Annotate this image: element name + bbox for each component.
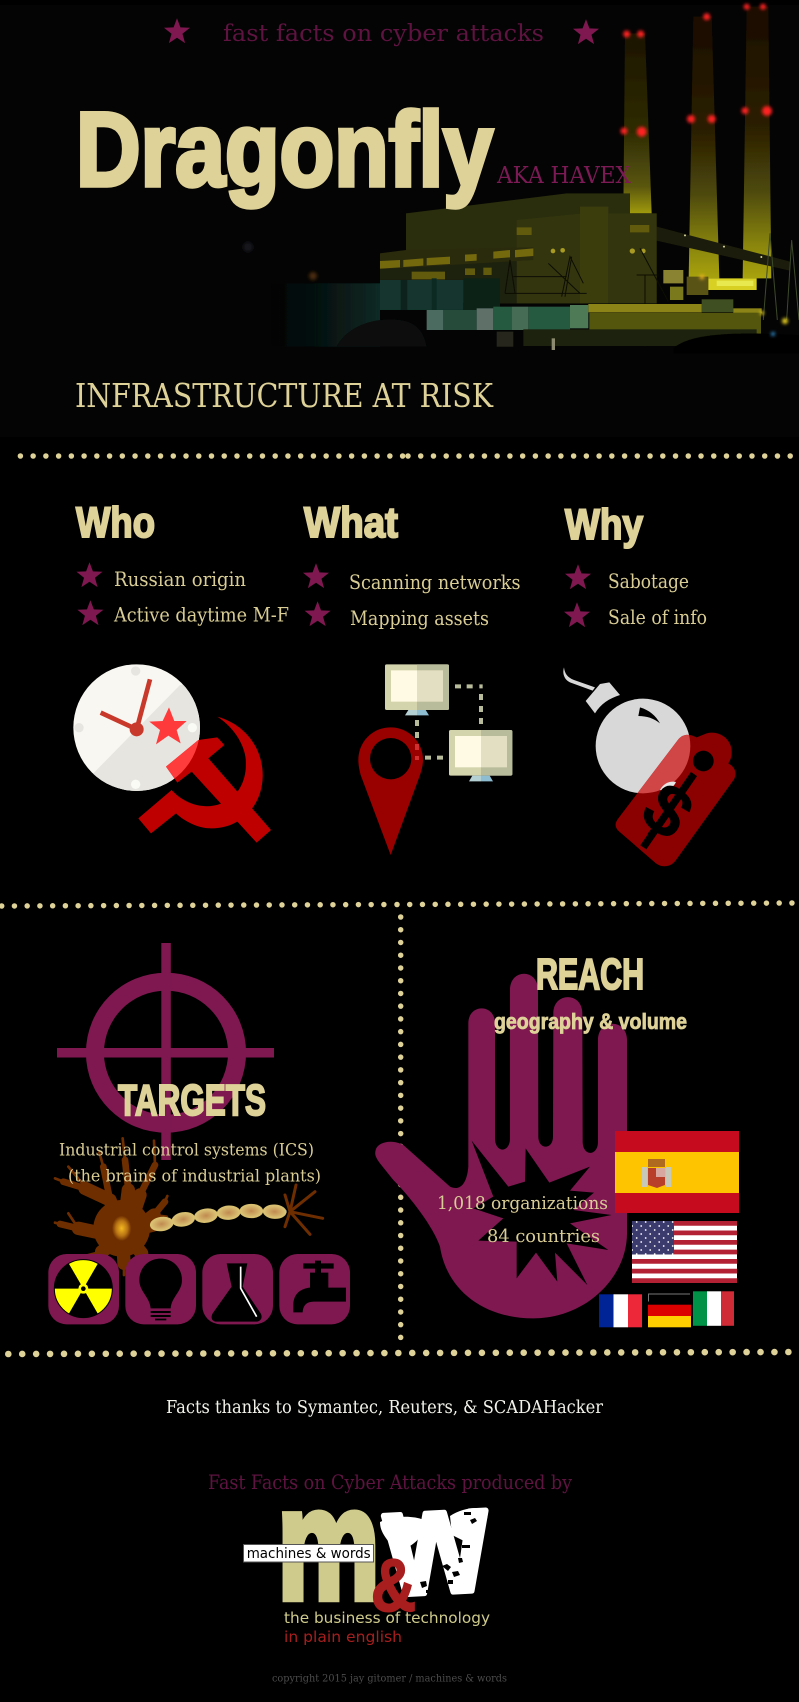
heading: who: Who <box>76 499 155 547</box>
icon row: industries <box>48 1254 350 1324</box>
flag: Spain <box>615 1131 739 1213</box>
icon: bomb and price tag: $ <box>626 766 709 856</box>
logo: machines and words: & <box>371 1544 416 1627</box>
heading: why: Why <box>565 501 643 549</box>
text: targets description: Industrial control systems (ICS) <box>59 1141 314 1161</box>
credits line: Facts thanks to Symantec, Reuters, & SCADAHacker <box>166 1398 604 1418</box>
heading: targets: TARGETS <box>118 1076 266 1125</box>
list: why items <box>564 564 707 629</box>
producer line: Fast Facts on Cyber Attacks produced by <box>208 1470 573 1494</box>
list: why items: Sale of info <box>608 606 707 629</box>
logo: machines and words: m <box>277 1455 380 1633</box>
title: Dragonfly <box>76 92 493 208</box>
icon: clock with hammer and sickle <box>73 664 271 843</box>
logo: machines and words: in plain english <box>284 1628 402 1646</box>
stat: organizations: 1,018 organizations <box>437 1193 608 1214</box>
logo: machines and words: the business of technology <box>284 1609 490 1627</box>
panel: reach <box>375 950 739 1327</box>
icon: star left <box>164 18 190 43</box>
icon: hand with burst <box>375 974 627 1318</box>
list: who items: Active daytime M-F <box>113 604 289 627</box>
panel: why <box>563 501 736 866</box>
heading: infrastructure at risk: INFRASTRUCTURE AT RISK <box>75 376 494 415</box>
hero photo: power plant at night <box>0 4 799 437</box>
heading: reach: REACH <box>536 950 644 999</box>
panel: what <box>303 499 520 855</box>
flag: USA <box>632 1221 737 1283</box>
icon: neuron <box>55 1138 323 1275</box>
flag: France <box>599 1294 642 1327</box>
flag: Italy <box>693 1291 734 1326</box>
list: why items: Sabotage <box>608 570 689 593</box>
logo: machines and words: machines & words <box>247 1546 371 1562</box>
icon: crosshair <box>57 943 274 1160</box>
logo: machines and words <box>244 1454 492 1646</box>
top banner <box>164 18 599 47</box>
copyright: copyright 2015 jay gitomer / machines & words <box>272 1672 507 1684</box>
icon: radiation <box>48 1254 119 1324</box>
panel: who <box>73 499 289 863</box>
list: what items: Scanning networks <box>349 571 520 594</box>
flag: Germany <box>648 1293 691 1327</box>
list: what items <box>303 563 520 630</box>
logo: machines and words: w <box>380 1454 492 1627</box>
icon: star right <box>573 19 599 44</box>
icon: bomb and price tag <box>563 667 736 866</box>
stat: countries: 84 countries <box>487 1226 600 1247</box>
text: targets description: (the brains of industrial plants) <box>68 1167 321 1187</box>
list: who items <box>76 562 289 627</box>
banner text: fast facts on cyber attacks <box>223 21 544 47</box>
heading: what: What <box>304 499 398 547</box>
icon: flask <box>202 1254 273 1324</box>
list: what items: Mapping assets <box>350 607 489 630</box>
list: who items: Russian origin <box>114 568 246 591</box>
text: targets description <box>59 1141 321 1187</box>
icon: light bulb <box>125 1254 196 1324</box>
subheading: geography and volume: geography & volume <box>494 1009 687 1034</box>
icon: faucet <box>279 1254 350 1324</box>
panel: targets <box>48 943 350 1324</box>
subtitle: aka: AKA HAVEX <box>496 163 632 189</box>
icon: networked monitors and map pin <box>358 664 512 855</box>
